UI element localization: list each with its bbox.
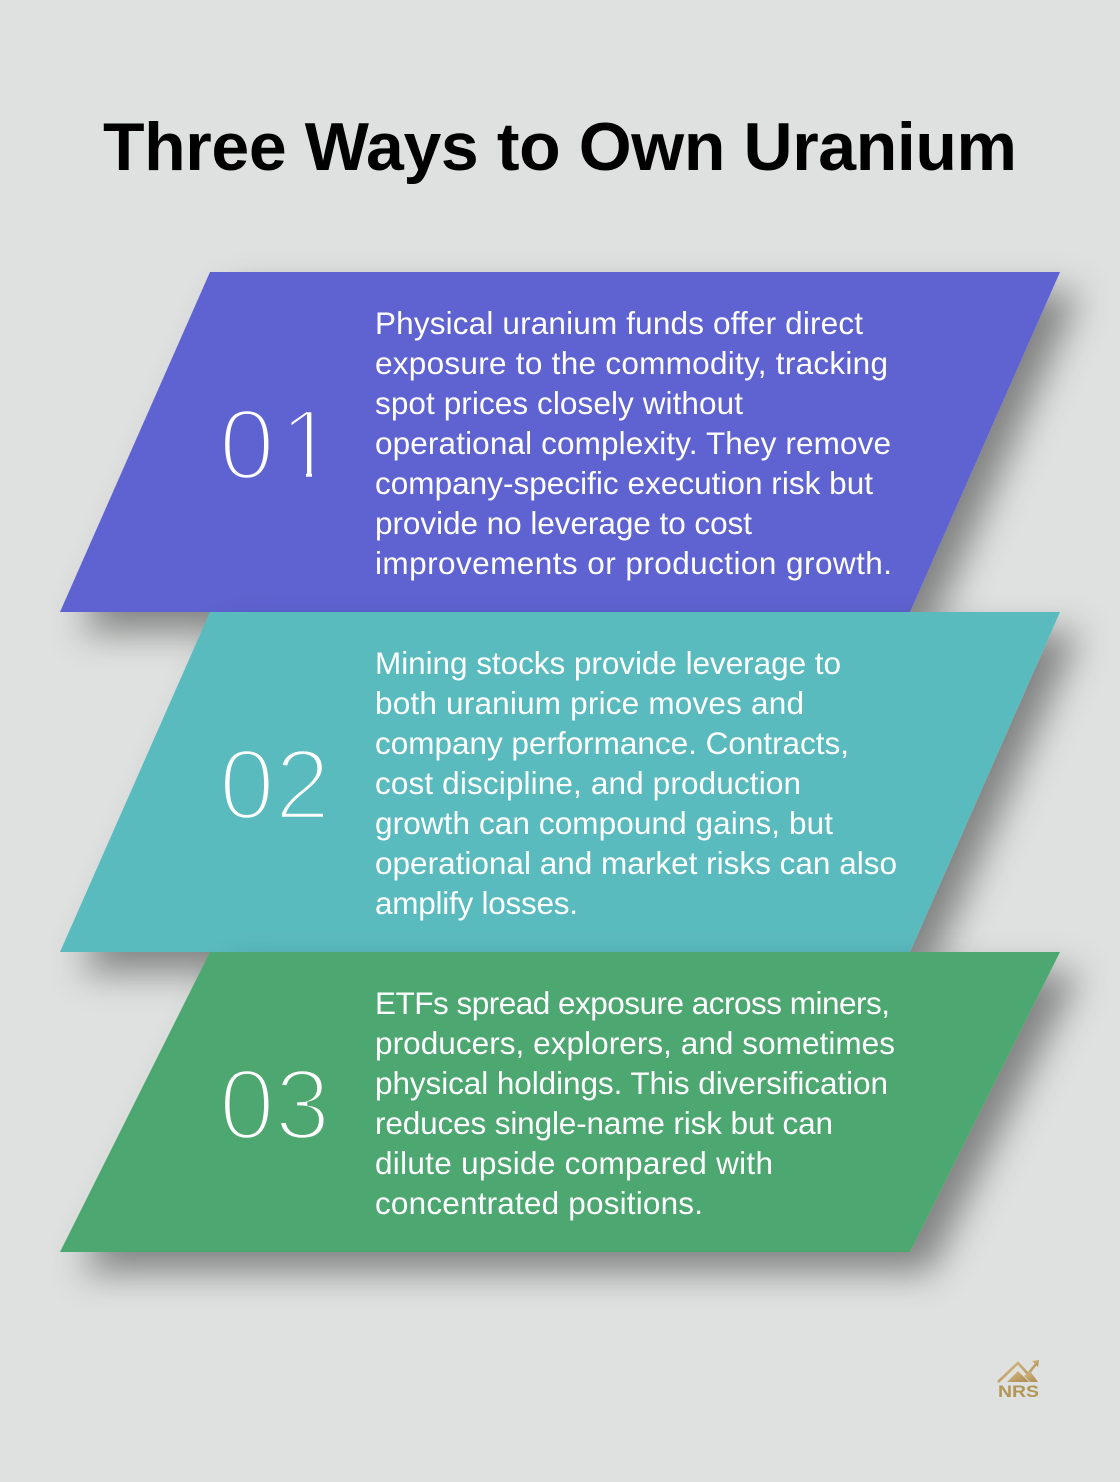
text block 1: company-specific execution risk but [375,465,873,501]
panel: ETFs [60,952,1060,1252]
text block 2: operational and market risks can also [375,845,897,881]
text block 3: physical holdings. This diversification [375,1065,888,1101]
text block 2: both uranium price moves and [375,685,804,721]
text block 1: spot prices closely without [375,385,743,421]
text block 2: company performance. Contracts, [375,725,849,761]
text block 2: amplify losses. [375,885,578,921]
panel shape 1 [60,272,1060,612]
number 01: 01 [219,389,335,501]
text block 1: provide no leverage to cost [375,505,752,541]
text block 3: dilute upside compared with [375,1145,773,1181]
panel shape 2 [60,612,1060,952]
text block 3: producers, explorers, and sometimes [375,1025,895,1061]
text block 3 [375,985,895,1221]
icon: NRS logo [998,1360,1039,1401]
text block 2: cost discipline, and production [375,765,801,801]
text block 1: exposure to the commodity, tracking [375,345,888,381]
text block 1: improvements or production growth. [375,545,892,581]
number 02: 02 [219,729,330,841]
icon: NRS logo: NRS [998,1383,1039,1401]
text block 1 [375,305,892,581]
title: Three Ways to Own Uranium [103,109,1017,185]
panel: mining stocks [60,612,1060,952]
text block 1: operational complexity. They remove [375,425,891,461]
text block 2: Mining stocks provide leverage to [375,645,841,681]
number 03: 03 [219,1049,330,1161]
panel shape 3 [60,952,1060,1252]
text block 3: concentrated positions. [375,1185,703,1221]
panel: physical uranium funds [60,272,1060,612]
text block 3: reduces single-name risk but can [375,1105,833,1141]
text block 2: growth can compound gains, but [375,805,833,841]
text block 1: Physical uranium funds offer direct [375,305,863,341]
text block 3: ETFs spread exposure across miners, [375,985,890,1021]
text block 2 [375,645,897,921]
